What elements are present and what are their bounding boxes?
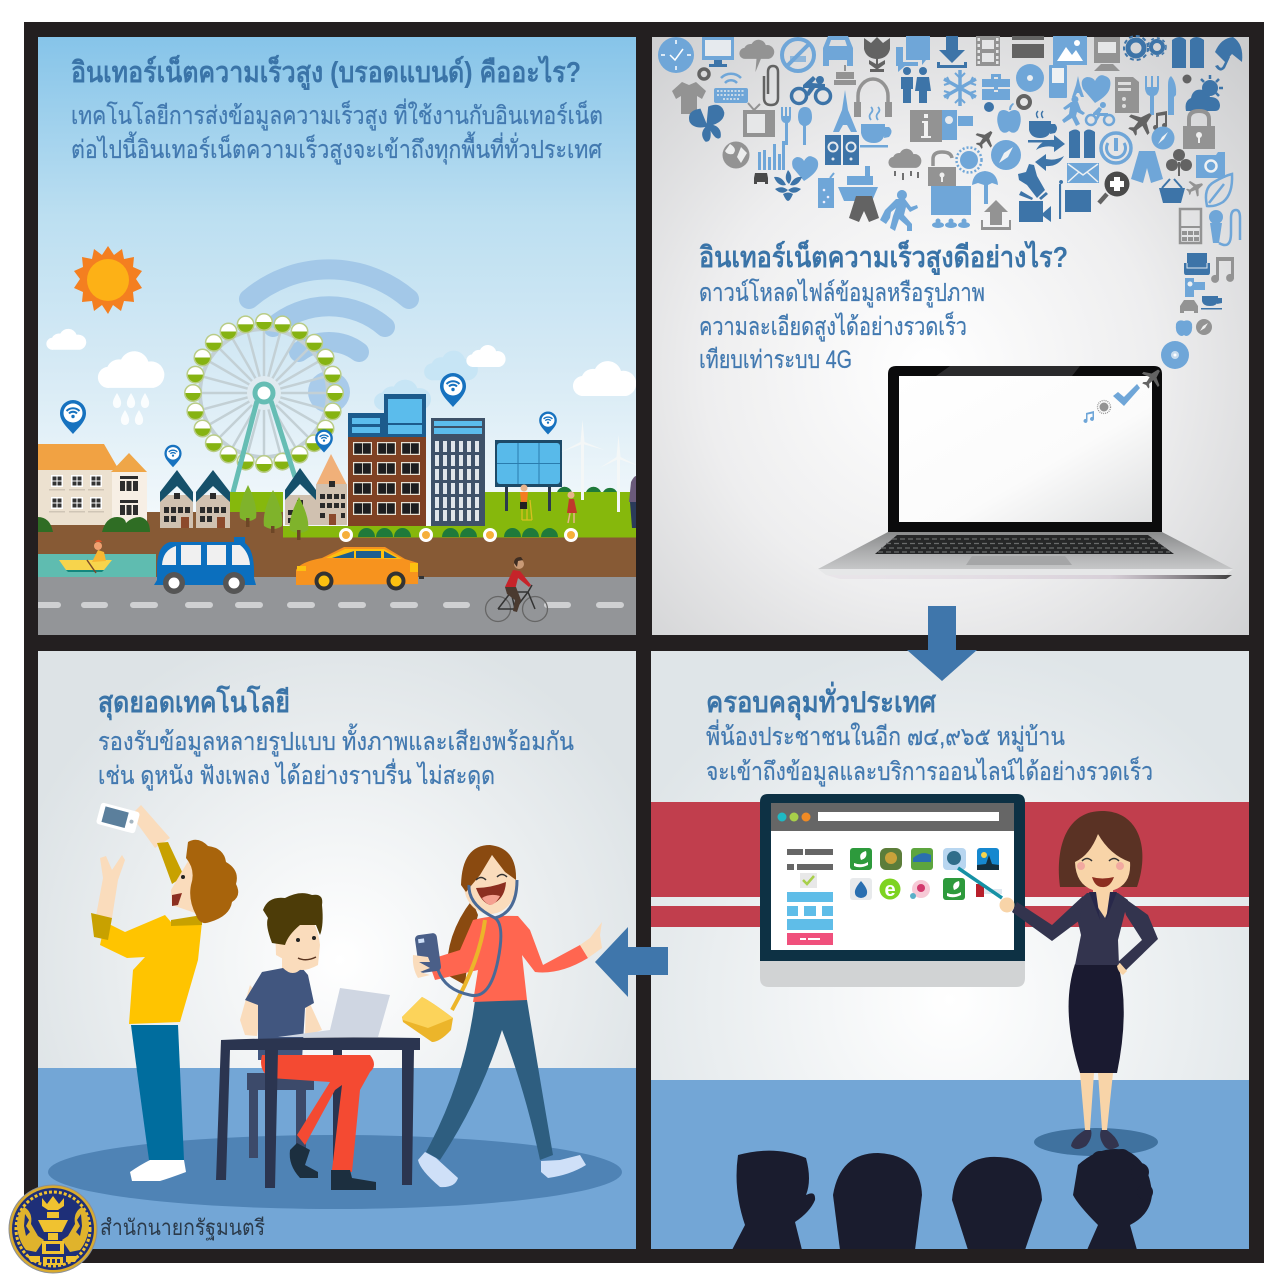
icon: small runner — [1062, 96, 1085, 126]
person: man taking selfie — [91, 802, 238, 1181]
icon: clock — [658, 37, 694, 73]
icon: flag — [1059, 180, 1091, 219]
icon: leaf — [1206, 174, 1232, 206]
ground: brown earth — [38, 512, 636, 578]
orange car — [296, 547, 424, 590]
cyclist — [486, 557, 548, 622]
icon: upload — [981, 200, 1011, 230]
icon: small eiffel — [1072, 76, 1084, 97]
icon: shirt — [672, 82, 706, 114]
icon: gears — [1124, 36, 1166, 60]
heading: nationwide: ครอบคลุมทั่วประเทศ — [706, 681, 937, 720]
icon: rain cloud — [888, 149, 921, 180]
icon: smartphone — [414, 933, 442, 973]
icon: eiffel tower — [833, 90, 857, 132]
wind turbines — [562, 420, 638, 512]
icon: train — [1094, 37, 1120, 71]
icon: thumbs up — [1018, 164, 1048, 200]
icon: knife — [1168, 76, 1176, 115]
audience head 2 — [833, 1153, 922, 1250]
icon: music note on screen — [1084, 411, 1094, 423]
icon: info board — [910, 110, 942, 142]
icon: runner with bag — [880, 190, 918, 231]
logo text: สำนักนายกรัฐมนตรี — [100, 1215, 265, 1241]
icon: cd — [1016, 64, 1044, 92]
icon: sun — [956, 148, 982, 172]
icon: sun on screen — [1098, 400, 1110, 414]
icon: small bike — [1086, 102, 1114, 125]
icon: check mark — [1113, 384, 1140, 406]
icon: music note — [1153, 111, 1167, 130]
body text: technology description: เช่น ดูหนัง ฟังเพลง ได้อย่างราบรื่น ไม่สะดุด — [98, 758, 495, 791]
icon: power button — [1101, 133, 1131, 163]
icon: equaliser bars — [758, 141, 785, 170]
icon: sun — [74, 246, 142, 314]
icon: clover — [1166, 149, 1192, 176]
logo: government seal — [9, 1185, 97, 1273]
icon: umbrella — [1215, 37, 1242, 71]
icon: headphones — [858, 79, 888, 107]
icon: gear — [1018, 96, 1030, 108]
body text: benefits: เทียบเท่าระบบ 4G — [699, 346, 852, 374]
icon: shoulder bag — [402, 920, 485, 1042]
icon: cake — [834, 65, 856, 85]
icon: tulip — [864, 37, 890, 72]
icon: globe — [722, 142, 750, 168]
road — [38, 577, 636, 635]
icon: briefcase — [982, 74, 1010, 100]
heading: why high speed: อินเทอร์เน็ตความเร็วสูงดีอย่างไร? — [699, 239, 1068, 275]
icon: billboard — [931, 186, 971, 228]
billboard — [495, 440, 562, 511]
terrace houses — [160, 454, 347, 528]
icon: bookmarked book — [1069, 130, 1095, 158]
panel: top technology — [38, 651, 636, 1249]
body text: villages — [706, 719, 1153, 787]
icon: motorbike — [792, 76, 830, 104]
blue bus — [154, 537, 256, 594]
icon: sun behind cloud — [1186, 75, 1223, 111]
app icons — [850, 848, 1002, 901]
body text: benefits — [699, 278, 985, 374]
icon: leaves — [774, 170, 802, 201]
icon: cd — [1161, 341, 1189, 369]
icon: computer tower — [1115, 77, 1139, 113]
icon: open book — [1172, 37, 1204, 68]
icon: retro tv — [743, 103, 775, 137]
body text: broadband description — [71, 98, 603, 165]
arrow: left — [595, 927, 668, 997]
icon: headphone cups — [854, 102, 892, 117]
arrow: down — [907, 606, 977, 681]
body text: benefits: ดาวน์โหลดไฟล์ข้อมูลหรือรูปภาพ — [699, 278, 985, 308]
icon: padlock — [1183, 111, 1215, 149]
icon: paperclip — [764, 66, 778, 105]
icon cloud — [658, 36, 1242, 369]
ground: green lawn — [230, 492, 636, 538]
icon: camera — [1196, 152, 1225, 178]
icon: plane — [1123, 105, 1159, 141]
icon: couple — [901, 67, 931, 103]
icon: snowflake — [944, 70, 976, 106]
person: man at laptop — [216, 893, 420, 1190]
body text: villages: จะเข้าถึงข้อมูลและบริการออนไลน์ได้อย่างรวดเร็ว — [706, 756, 1153, 787]
small people on lawn — [520, 476, 636, 528]
icon: butterfly — [687, 103, 730, 145]
icon: fork — [1145, 76, 1159, 115]
body text: villages: พี่น้องประชาชนในอีก ๗๔,๙๖๕ หมู่บ้าน — [706, 719, 1065, 752]
icon: open padlock — [928, 152, 956, 186]
audience silhouettes — [732, 1149, 1153, 1250]
icon: umbrella — [972, 171, 998, 204]
red wall bands — [651, 802, 1249, 927]
audience head 1 — [732, 1151, 815, 1250]
icon: small car — [754, 173, 768, 184]
icon: ship — [838, 166, 878, 201]
person: woman with headphones — [402, 845, 602, 1187]
floor — [38, 1068, 636, 1249]
stage floor — [651, 1080, 1249, 1250]
icon: small camcorder — [1185, 278, 1205, 297]
big house — [38, 444, 150, 532]
trees — [240, 485, 308, 540]
presenter — [958, 811, 1158, 1156]
heading: what is broadband: อินเทอร์เน็ตความเร็วสูง (บรอดแบนด์) คืออะไร? — [71, 54, 581, 90]
icon: basket — [1159, 179, 1185, 203]
icon: gear — [699, 69, 709, 79]
clouds — [46, 329, 636, 425]
body text: technology description — [98, 723, 574, 791]
icon: video camera — [942, 110, 973, 140]
icon: phone held up — [96, 802, 140, 834]
app icons: e — [884, 879, 896, 901]
icon: monitor — [702, 37, 734, 67]
icon: magnifier plus — [1099, 172, 1130, 203]
icon: dark cup — [1028, 111, 1057, 142]
icon: refresh arrows — [1035, 135, 1065, 171]
sidebar form — [787, 849, 833, 945]
icon: compass — [991, 140, 1021, 170]
icon: small clover — [1182, 74, 1192, 84]
icon: fork and spoon — [781, 107, 812, 145]
icon: mobile phone — [1049, 65, 1067, 98]
brown apartment building — [348, 394, 426, 526]
panel: benefits of high speed internet — [652, 36, 1249, 635]
body text: benefits: ความละเอียดสูงได้อย่างรวดเร็ว — [699, 311, 967, 342]
icon: shorts — [1131, 151, 1163, 183]
icon: car — [823, 36, 853, 66]
icon: camcorder — [1019, 191, 1051, 222]
icon: small compass — [1152, 126, 1174, 150]
icon: microphone — [1209, 210, 1240, 245]
icon: shorts — [849, 196, 879, 222]
audience head 3 — [952, 1157, 1042, 1250]
icon: open laptop — [278, 988, 390, 1037]
icon: music note — [1211, 257, 1234, 283]
hedges and flowers — [339, 487, 617, 542]
icon: plane on screen — [1137, 363, 1167, 393]
icon: storm cloud — [739, 40, 774, 72]
ferris wheel — [184, 313, 344, 500]
icon: compass grey — [1196, 319, 1212, 335]
icon: speakers — [825, 135, 859, 165]
body text: broadband description: ต่อไปนี้อินเทอร์เน็ตความเร็วสูงจะเข้าถึงทุกพื้นที่ทั่วประเทศ — [71, 131, 602, 165]
panel: nationwide coverage — [651, 651, 1249, 1250]
body text: technology description: รองรับข้อมูลหลายรูปแบบ ทั้งภาพและเสียงพร้อมกัน — [98, 723, 574, 757]
icon: grey handset — [1180, 209, 1201, 243]
laptop — [818, 363, 1233, 579]
icon: card — [1012, 36, 1044, 58]
icon: coffee cup — [860, 107, 892, 148]
icon: hearts — [1082, 75, 1110, 103]
presentation screen — [760, 794, 1025, 987]
icon: download — [937, 36, 967, 68]
wifi location pins — [60, 373, 557, 467]
icon: plane — [971, 125, 999, 153]
icon: drink — [818, 173, 834, 208]
audience head 4 — [1073, 1149, 1153, 1250]
icon: no sign — [782, 39, 814, 71]
icon: headphone cable — [438, 880, 517, 996]
icon: small cup — [1201, 296, 1222, 310]
icon: apple — [1176, 320, 1192, 336]
icon: small car — [1180, 300, 1198, 313]
icon: picture — [1053, 36, 1087, 65]
icon: small heart — [984, 102, 994, 112]
icon: apple — [997, 103, 1021, 133]
icon: wifi signal — [249, 269, 409, 413]
icon: plane — [1183, 176, 1207, 200]
icon: chat — [896, 36, 930, 72]
floor shadow — [48, 1135, 622, 1209]
grey office tower — [431, 418, 485, 526]
water and boat — [38, 540, 156, 578]
panel: what is broadband (city scene) — [38, 37, 638, 635]
icon: wifi keyboard — [714, 74, 748, 103]
body text: broadband description: เทคโนโลยีการส่งข้อมูลความเร็วสูง ที่ใช้งานกับอินเทอร์เน็ต — [71, 98, 603, 131]
icon: hearts — [792, 156, 818, 181]
heading: top technology: สุดยอดเทคโนโลยี — [98, 684, 290, 720]
icon: armchair — [1184, 253, 1210, 275]
icon: mail — [1067, 163, 1099, 183]
table — [216, 1037, 420, 1188]
icon: film strip — [976, 36, 1000, 66]
